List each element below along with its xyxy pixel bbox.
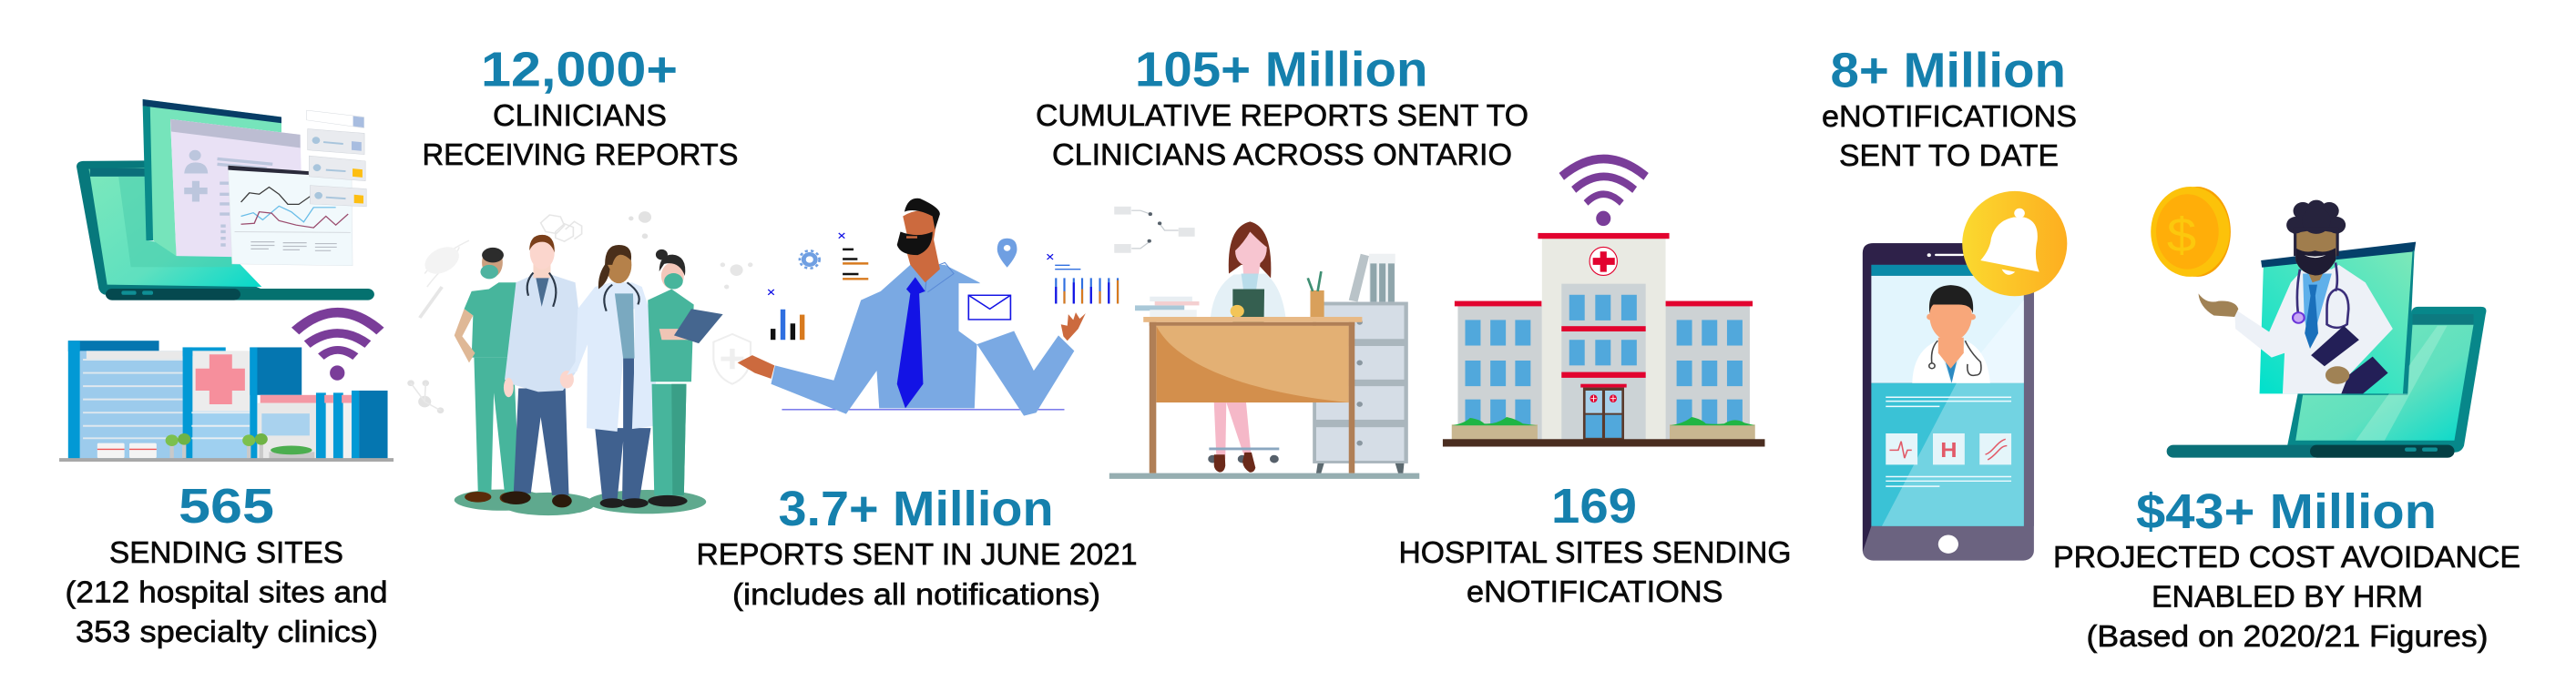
label: cumulative reports sent to clinicians <box>1036 98 1528 171</box>
label: cumulative reports sent to clinicians: CLINICIANS ACROSS ONTARIO <box>1052 137 1512 171</box>
stat: $43+ Million: $43+ Million <box>2136 484 2437 539</box>
label: projected cost avoidance <box>2053 540 2520 653</box>
panel: clinicians <box>407 42 751 515</box>
stat: 169: 169 <box>1551 479 1637 534</box>
illustration: clinician at desk with filing cabinet <box>1109 207 1419 479</box>
illustration: doctor emerging from laptop with coin: $ <box>2167 208 2196 262</box>
stat: 565: 565 <box>179 479 274 534</box>
label: clinicians receiving reports <box>423 98 738 171</box>
label: projected cost avoidance: ENABLED BY HRM <box>2152 579 2423 614</box>
label: hospital sites sending eNotifications <box>1399 535 1791 608</box>
illustration: doctor emerging from laptop with coin <box>2151 187 2486 458</box>
label: sending sites <box>66 535 387 648</box>
panel: reports sent in June 2021 <box>696 198 1137 611</box>
stat: 105+ Million: 105+ Million <box>1135 42 1428 97</box>
label: eNotifications sent to date: SENT TO DATE <box>1839 138 2059 172</box>
label: reports sent in June 2021: REPORTS SENT IN JUNE 2021 <box>696 537 1137 571</box>
icon: smartphone with doctor and bell: H <box>1940 439 1958 463</box>
stat: 12,000+: 12,000+ <box>481 42 678 97</box>
panel: hospital sites sending eNotifications <box>1399 158 1791 608</box>
icon: laptop with patient record windows <box>77 99 374 300</box>
stat: 3.7+ Million: 3.7+ Million <box>778 482 1053 536</box>
label: sending sites: SENDING SITES <box>109 535 343 569</box>
label: reports sent in June 2021 <box>696 537 1137 611</box>
panel: sending sites <box>59 99 394 648</box>
label: hospital sites sending eNotifications: eNOTIFICATIONS <box>1467 575 1723 608</box>
label: clinicians receiving reports: CLINICIANS <box>493 98 667 132</box>
label: sending sites: 353 specialty clinics) <box>76 615 378 648</box>
panel: cumulative reports <box>1036 42 1528 479</box>
panel: cost avoidance <box>2053 187 2520 653</box>
icon: hospital building with wifi <box>59 312 394 462</box>
label: cumulative reports sent to clinicians: CUMULATIVE REPORTS SENT TO <box>1036 98 1528 132</box>
label: sending sites: (212 hospital sites and <box>66 575 387 608</box>
label: clinicians receiving reports: RECEIVING REPORTS <box>423 137 738 171</box>
label: reports sent in June 2021: (includes all notifications) <box>732 577 1100 611</box>
panel: eNotifications sent <box>1822 44 2077 561</box>
illustration: man presenting with charts and envelope <box>721 198 1118 416</box>
label: projected cost avoidance: (Based on 2020/21 Figures) <box>2086 619 2489 653</box>
label: hospital sites sending eNotifications: HOSPITAL SITES SENDING <box>1399 535 1791 569</box>
icon: smartphone with doctor and bell <box>1863 191 2067 561</box>
label: eNotifications sent to date: eNOTIFICATIONS <box>1822 99 2077 133</box>
illustration: team of clinicians <box>407 211 751 515</box>
label: eNotifications sent to date <box>1822 99 2077 172</box>
stat: 8+ Million: 8+ Million <box>1831 44 2066 98</box>
illustration: hospital with wifi signal <box>1443 158 1764 447</box>
label: projected cost avoidance: PROJECTED COST AVOIDANCE <box>2053 540 2520 574</box>
